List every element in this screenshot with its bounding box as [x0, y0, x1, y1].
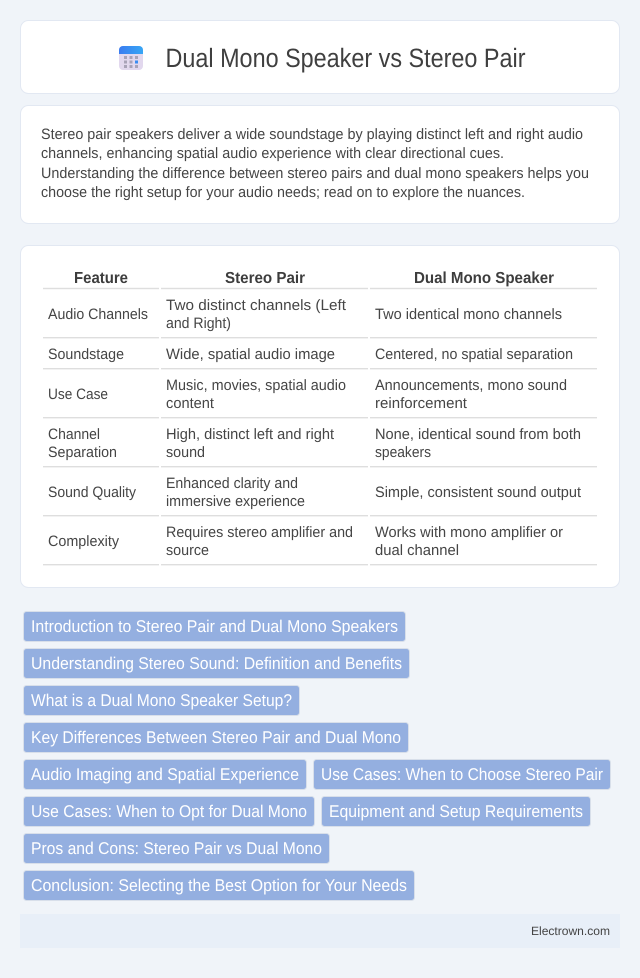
- panel: introduction: [20, 106, 620, 224]
- panel: comparison table: [20, 246, 620, 588]
- row: channel separation: speakers: [375, 444, 431, 461]
- row: soundstage: Centered, no spatial separation: [375, 346, 573, 363]
- footer: Electrown.com: [531, 924, 610, 938]
- table header row: [74, 270, 554, 287]
- panel: title card: [20, 20, 620, 94]
- intro text: choose the right setup for your audio needs; read on to explore the nuances.: [41, 184, 525, 201]
- intro text: channels, enhancing spatial audio experience with clear directional cues.: [41, 145, 504, 162]
- table header row: Dual Mono Speaker: [414, 270, 554, 287]
- tag: audio imaging: Audio Imaging and Spatial Experience: [31, 765, 299, 784]
- row: channel separation: sound: [166, 444, 205, 461]
- row: channel separation: [48, 426, 581, 461]
- tag: understanding stereo: [24, 648, 410, 678]
- row: audio channels: Audio Channels: [48, 306, 148, 323]
- row: soundstage: Wide, spatial audio image: [166, 346, 335, 363]
- row: audio channels: and Right): [166, 315, 231, 332]
- tag: dual mono setup: What is a Dual Mono Speaker Setup?: [31, 691, 292, 710]
- row: complexity: Requires stereo amplifier and: [166, 524, 353, 541]
- topic links: [24, 612, 610, 900]
- row: use case: Music, movies, spatial audio: [166, 377, 346, 394]
- table header row: Feature: [74, 270, 128, 287]
- footer: [20, 914, 620, 948]
- tag: pros and cons: Pros and Cons: Stereo Pair vs Dual Mono: [31, 839, 322, 858]
- row: use case: [48, 377, 567, 412]
- tag: use cases stereo: [314, 760, 610, 790]
- row: channel separation: Separation: [48, 444, 117, 461]
- row: audio channels: [48, 297, 562, 332]
- row: use case: Announcements, mono sound: [375, 377, 567, 394]
- row: sound quality: immersive experience: [166, 493, 305, 510]
- row: complexity: source: [166, 542, 209, 559]
- row: complexity: Complexity: [48, 533, 119, 550]
- row: channel separation: Channel: [48, 426, 100, 443]
- row: soundstage: Soundstage: [48, 346, 124, 363]
- row: sound quality: [48, 475, 582, 510]
- tag: dual mono setup: [24, 686, 300, 716]
- tag: key differences: Key Differences Between Stereo Pair and Dual Mono: [31, 728, 401, 747]
- table rules: [43, 288, 597, 565]
- tag: use cases dual mono: [24, 796, 314, 826]
- row: sound quality: Sound Quality: [48, 484, 136, 501]
- row: soundstage: [48, 346, 573, 363]
- title: Dual Mono Speaker vs Stereo Pair: [166, 43, 526, 73]
- tag: understanding stereo: Understanding Stereo Sound: Definition and Benefits: [31, 654, 402, 673]
- tag: pros and cons: [24, 834, 330, 864]
- tag: equipment: [322, 796, 590, 826]
- tag: key differences: [24, 722, 408, 752]
- tag: use cases dual mono: Use Cases: When to Opt for Dual Mono: [31, 802, 307, 821]
- row: sound quality: Simple, consistent sound output: [375, 484, 582, 501]
- row: audio channels: Two distinct channels (Left: [166, 297, 347, 314]
- table header row: Stereo Pair: [225, 270, 305, 287]
- intro text: [41, 126, 589, 201]
- row: complexity: dual channel: [375, 542, 459, 559]
- tag: introduction: [24, 612, 406, 642]
- row: complexity: Works with mono amplifier or: [375, 524, 563, 541]
- intro text: Stereo pair speakers deliver a wide soundstage by playing distinct left and right audio: [41, 126, 583, 143]
- tag: audio imaging: [24, 760, 306, 790]
- row: complexity: [48, 524, 563, 559]
- tag: conclusion: [24, 870, 414, 900]
- row: use case: reinforcement: [375, 395, 468, 412]
- tag: conclusion: Conclusion: Selecting the Best Option for Your Needs: [31, 876, 407, 895]
- row: channel separation: None, identical sound from both: [375, 426, 581, 443]
- row: use case: content: [166, 395, 215, 412]
- row: audio channels: Two identical mono channels: [375, 306, 562, 323]
- tag: introduction: Introduction to Stereo Pair and Dual Mono Speakers: [31, 617, 398, 636]
- intro text: Understanding the difference between stereo pairs and dual mono speakers helps you: [41, 165, 589, 182]
- row: channel separation: High, distinct left and right: [166, 426, 335, 443]
- row: sound quality: Enhanced clarity and: [166, 475, 298, 492]
- icon: calendar grid: [119, 46, 143, 70]
- row: use case: Use Case: [48, 386, 108, 403]
- tag: use cases stereo: Use Cases: When to Choose Stereo Pair: [321, 765, 603, 784]
- tag: equipment: Equipment and Setup Requirements: [329, 802, 583, 821]
